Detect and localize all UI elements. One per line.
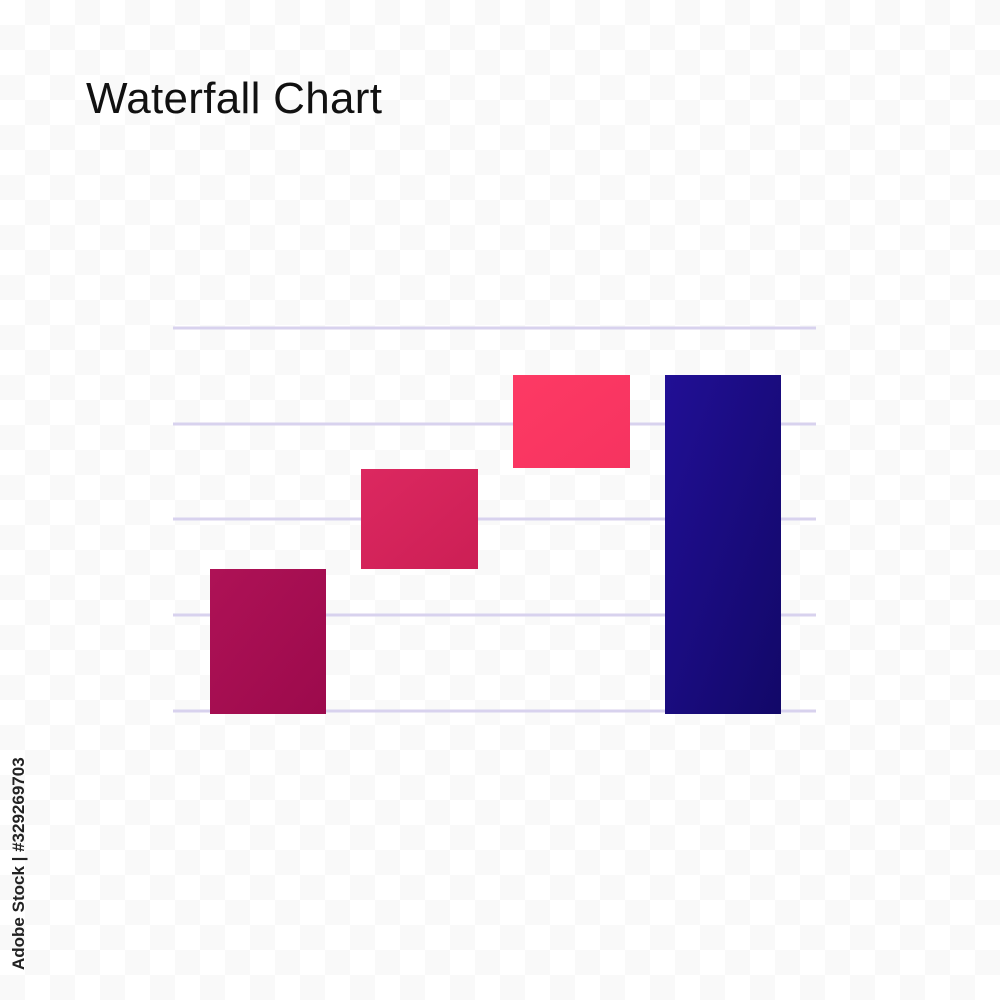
title: Waterfall Chart: [86, 74, 382, 123]
vertical stock label: Adobe Stock | #329269703: [9, 757, 28, 970]
bar 3: [513, 375, 630, 468]
bar 2: [361, 469, 478, 569]
bar 4 total: [665, 375, 781, 714]
bar 1: [210, 569, 326, 714]
